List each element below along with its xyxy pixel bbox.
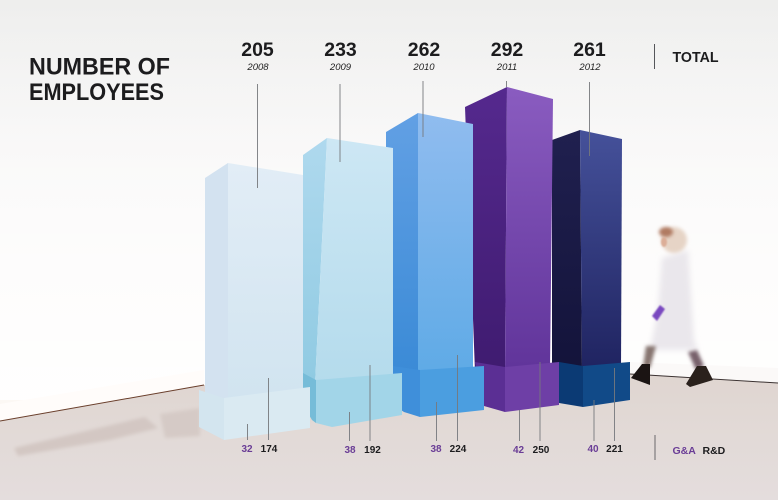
breakdown 2009 — [344, 365, 381, 456]
total label 2008 — [241, 39, 274, 188]
legend: G&A and R&D: G&A — [672, 445, 696, 457]
total label 2008: 2008 — [246, 62, 269, 73]
breakdown 2012: 221 — [606, 444, 623, 455]
total label 2011 — [491, 39, 523, 87]
breakdown 2009: 192 — [364, 445, 381, 456]
total label 2011: 292 — [491, 39, 523, 61]
bar 2009 — [303, 138, 402, 427]
bar 2011 — [465, 87, 559, 412]
bar 2008 — [199, 163, 310, 440]
total label 2009: 233 — [324, 39, 357, 61]
breakdown 2011: 42 — [513, 445, 524, 456]
breakdown 2009: 38 — [344, 445, 356, 456]
breakdown 2011: 250 — [533, 445, 550, 456]
breakdown 2010: 224 — [450, 444, 467, 455]
column 2012 — [552, 130, 622, 372]
total label 2009: 2009 — [329, 62, 352, 73]
legend: G&A and R&D: R&D — [702, 445, 726, 457]
column 2010 — [386, 113, 473, 378]
total label 2012: 2012 — [578, 62, 601, 73]
total label 2011: 2011 — [496, 62, 517, 73]
title: NUMBER OF — [29, 54, 170, 80]
total label 2008: 205 — [241, 39, 274, 61]
title: EMPLOYEES — [29, 79, 164, 106]
base 2009 — [303, 373, 402, 427]
base 2010 — [386, 365, 484, 417]
total label 2010: 262 — [408, 39, 440, 61]
column 2008 — [205, 163, 303, 402]
breakdown 2011 — [513, 362, 550, 456]
total label 2009 — [324, 39, 357, 162]
base 2011 — [475, 362, 559, 412]
title — [29, 54, 170, 106]
breakdown 2008: 174 — [261, 444, 278, 455]
breakdown 2010 — [430, 355, 467, 455]
total label 2012: 261 — [573, 39, 606, 61]
legend: total: TOTAL — [672, 50, 719, 66]
walking person photo — [631, 227, 713, 387]
base 2012 — [559, 362, 630, 407]
column 2009 — [303, 138, 393, 385]
total label 2010: 2010 — [412, 62, 435, 73]
legend: G&A and R&D — [655, 435, 726, 460]
breakdown 2008: 32 — [241, 444, 253, 455]
breakdown 2010: 38 — [430, 444, 442, 455]
bar 2012 — [552, 130, 630, 407]
column 2011 — [465, 87, 553, 372]
total label 2010 — [408, 39, 440, 137]
legend: total — [654, 44, 719, 69]
breakdown 2012 — [587, 368, 623, 455]
breakdown 2012: 40 — [587, 444, 599, 455]
bar 2010 — [386, 113, 484, 417]
total label 2012 — [573, 39, 606, 156]
base 2008 — [199, 387, 310, 440]
breakdown 2008 — [241, 378, 278, 455]
